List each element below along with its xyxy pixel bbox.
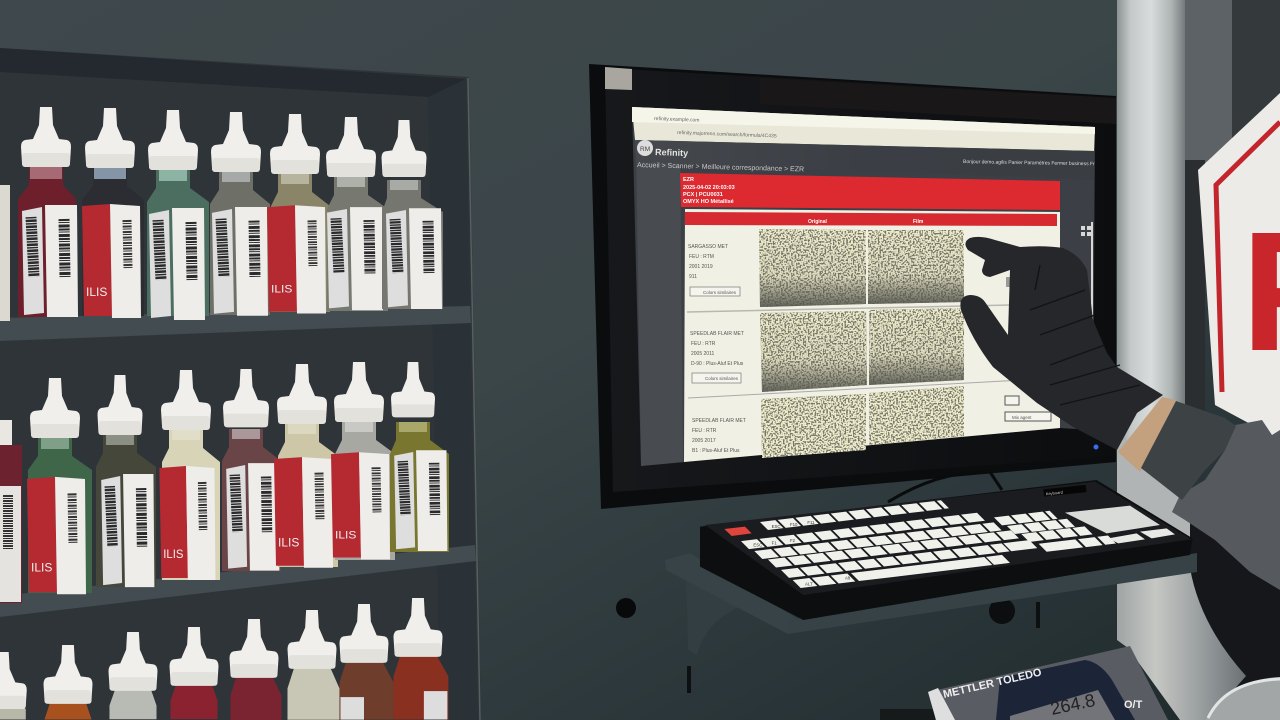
scale brand: METTLER TOLEDO	[942, 666, 1043, 701]
metal pipe column	[1117, 0, 1200, 585]
bottle 3 silver	[108, 632, 158, 719]
sleeve	[1141, 401, 1280, 590]
bottle 7 grey	[382, 120, 443, 309]
cable	[888, 472, 1002, 502]
bracket	[686, 570, 742, 655]
power light	[1094, 444, 1098, 450]
brand plate: Keyboard	[1046, 490, 1063, 496]
bottle 1 wine red	[18, 107, 78, 317]
app header: RM	[640, 146, 650, 153]
row 3 text	[692, 418, 746, 454]
key labels: F11	[807, 520, 815, 525]
action buttons	[1005, 277, 1051, 421]
key labels: ALT	[805, 581, 813, 586]
touchpad buttons	[1108, 528, 1175, 543]
row 1 text	[688, 244, 740, 296]
red banner: EZR	[683, 177, 694, 183]
bottle sliver	[0, 185, 10, 321]
row 1 text: SARGASSO MET	[688, 244, 728, 250]
bottle 3 green	[147, 110, 209, 320]
row 2 text: SPEEDLAB FLAIR MET	[690, 331, 744, 337]
background right	[1185, 0, 1280, 720]
bottle 7 gold	[390, 362, 449, 552]
row 3 text: FEU : RTR	[692, 428, 717, 434]
scale reading: 264.8	[1049, 690, 1097, 719]
app header	[635, 140, 1095, 180]
bottle 2 dark red	[82, 108, 144, 318]
results table: Film	[913, 219, 924, 225]
numpad keys	[998, 511, 1112, 550]
shelf: top	[0, 306, 471, 341]
red and white sign	[1198, 93, 1280, 440]
monitor	[589, 64, 1116, 509]
bottle 6 cream	[288, 610, 339, 720]
row 1 text: 2001 2019	[689, 264, 713, 270]
key labels	[753, 520, 851, 586]
shelf: middle	[0, 545, 476, 617]
app header: Accueil > Scanner > Meilleure correspondance > EZR	[637, 162, 804, 173]
row 2 text: D-90 : Plus-Aluf Et Plus	[691, 361, 744, 367]
shelf unit	[0, 48, 481, 720]
bottle 2 olive dark	[96, 375, 156, 587]
red banner: OMYX HO Métallisé	[683, 199, 734, 205]
row 3 text: B1 : Plus-Aluf Et Plus	[692, 448, 740, 454]
scale key: O/T	[1124, 699, 1143, 711]
bottle 6 silver	[326, 117, 388, 311]
bottle 8 red-brown	[394, 598, 448, 720]
row 2 text: Colors similaires	[705, 376, 739, 381]
pipe bend	[1117, 568, 1246, 720]
row 1 text: Colors similaires	[703, 290, 737, 295]
bottle 3 cream	[159, 370, 220, 580]
key labels: F1	[772, 541, 777, 546]
screen	[632, 107, 1095, 466]
row 2 text: 2005 2011	[691, 351, 714, 357]
bottle 5 cream red	[274, 364, 338, 568]
bottles: top row	[0, 107, 443, 321]
app header: Bonjour demo.agilis Panier Paramètres Fermer business Fr	[963, 159, 1095, 167]
row 3 text: 2005 2017	[692, 438, 716, 444]
key labels: F2	[790, 538, 796, 543]
bottle sliver red	[0, 420, 22, 603]
bottle 5 olive	[267, 114, 330, 314]
metal cup	[1206, 677, 1280, 720]
glove hand	[960, 237, 1163, 450]
keyboard shelf	[665, 553, 1197, 655]
bottle 4 silver	[210, 112, 270, 316]
cuff	[1141, 401, 1236, 500]
bottle 2 orange	[44, 645, 92, 719]
browser bar: refinity.example.com	[654, 116, 700, 124]
results table	[684, 209, 1060, 465]
keyboard	[700, 480, 1193, 620]
touchpad	[1065, 506, 1160, 533]
results table: Original	[808, 219, 828, 225]
bottle 7 brown	[340, 604, 393, 720]
key labels: ESC	[753, 543, 762, 548]
browser bar: refinity.majorrenn.com/search/formula/4C435	[677, 130, 777, 139]
colour sample panels	[755, 225, 970, 465]
row 3 text: SPEEDLAB FLAIR MET	[692, 418, 746, 424]
bottles: bottom row	[0, 598, 448, 720]
scrollbar	[1091, 222, 1093, 326]
red banner	[680, 173, 1060, 210]
glove wrinkles	[1030, 265, 1140, 405]
bottle 4 red	[170, 627, 218, 719]
wall holes	[616, 598, 1040, 720]
scale display	[928, 646, 1168, 720]
sleeve body	[1172, 420, 1280, 590]
bottle 4 maroon	[222, 369, 281, 571]
key labels: Alt	[845, 575, 851, 580]
row 1 text: FEU : RTM	[689, 254, 714, 260]
bottles: middle row	[0, 362, 449, 603]
bottle 6 silver red	[331, 362, 395, 560]
main keys	[730, 490, 1118, 585]
row 1 text: 911	[689, 274, 697, 280]
action buttons: Mix agent	[1012, 415, 1032, 420]
red banner: PCX | PCU0031	[683, 192, 723, 198]
brand plate	[1043, 485, 1086, 497]
touch icon	[1081, 226, 1091, 236]
red banner: 2025-04-02 20:03:03	[683, 185, 735, 191]
row 2 text: FEU : RTR	[691, 341, 716, 347]
key labels: F10	[790, 522, 798, 527]
app header: Refinity	[655, 147, 688, 158]
power key	[724, 527, 752, 536]
browser bar	[632, 107, 1095, 151]
bottle 1	[0, 652, 27, 719]
bottle 1 green	[27, 378, 92, 594]
bottle 5 maroon	[230, 619, 281, 720]
key labels: ESC	[772, 524, 781, 529]
arm skin	[1118, 397, 1176, 472]
row 2 text	[690, 331, 744, 383]
